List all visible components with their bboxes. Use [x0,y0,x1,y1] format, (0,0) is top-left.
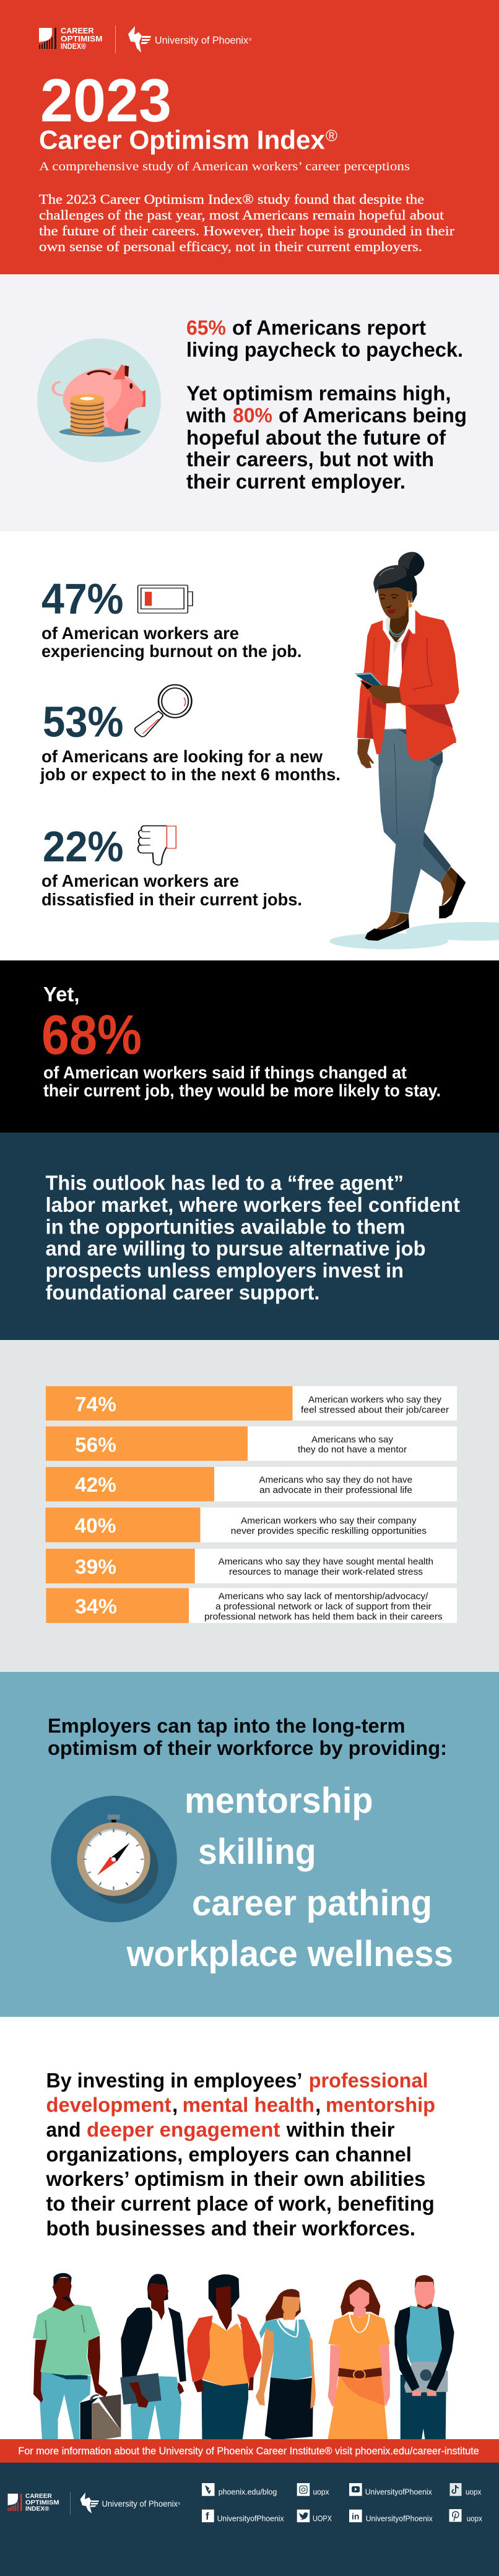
text: optimism stat [186,383,467,494]
person: woman in orange dress [328,2279,390,2439]
intro text block [39,191,455,254]
text: stay description: their current job, they would be more likely to stay. [43,1081,441,1100]
logo: University of Phoenix footer: ® [178,2502,181,2506]
icon: piggy bank [37,338,161,462]
text: investing in employees: mental health [183,2094,315,2117]
bar: 39% mental health resources: 39% [75,1555,116,1578]
intro text block: The 2023 Career Optimism Index® study found that despite the [39,191,424,207]
text: investing in employees [46,2069,435,2240]
person: man with briefcase [33,2273,121,2439]
panel: more information banner [0,2439,499,2463]
person: man with folder [120,2274,186,2439]
bar: 39% mental health resources: resources to manage their work-related stress [229,1567,423,1577]
social: youtube [349,2483,432,2497]
panel: free agent [0,1133,499,1340]
text: investing in employees: By investing in employees’ [46,2069,302,2092]
text: free agent labor market: foundational career support. [46,1282,319,1305]
text: optimism stat: 80% [233,404,272,427]
bar: 40% no reskilling: never provides specific reskilling opportunities [231,1526,427,1536]
title: ® [326,126,337,145]
social: facebook: f [206,2510,209,2522]
subtitle: A comprehensive study of American workers’ career perceptions [39,160,410,173]
panel: footer [0,2463,499,2576]
bar: 34% lack of mentorship [46,1588,457,1623]
bar: 39% mental health resources: Americans who say they have sought mental health [219,1556,433,1567]
panel: worker stats [0,531,499,960]
text: stay description: of American workers said if things changed at [43,1063,407,1082]
social: linkedin [349,2510,433,2523]
bar: 56% no mentor: Americans who say [311,1434,393,1445]
bar: 40% no reskilling [46,1508,457,1543]
text: free agent labor market: labor market, where workers feel confident [46,1194,460,1217]
illustration: group of six workers [33,2273,454,2439]
bar: 34% lack of mentorship: a professional network or lack of support from their [215,1601,432,1612]
logo: Career Optimism Index: OPTIMISM [61,34,103,43]
bar: 42% no advocate [46,1467,457,1501]
social: linkedin: in [352,2512,359,2522]
social: pinterest [449,2509,482,2523]
bar: 42% no advocate: 42% [75,1473,116,1496]
text: investing in employees: mentorship [326,2094,435,2117]
stat: 53% job seekers [40,698,341,784]
person: woman in blue top [256,2289,316,2439]
logo: Career Optimism Index footer: CAREER [25,2492,52,2500]
logo: Career Optimism Index footer [7,2492,59,2513]
social: twitter [297,2510,332,2523]
text: investing in employees: development [46,2094,171,2117]
social: instagram: uopx [313,2487,329,2497]
social: facebook [202,2510,284,2523]
social: blog: phoenix.edu/blog [219,2487,277,2497]
text: paycheck stat: 65% [186,317,226,340]
bar: 34% lack of mentorship: professional network has held them back in their careers [204,1611,443,1622]
text: free agent labor market: prospects unless employers invest in [46,1260,404,1282]
list: mentorship: mentorship [184,1781,373,1821]
intro text block: the future of their careers. However, their hope is grounded in their [39,223,455,238]
icon: thumbs down [138,826,176,865]
text: free agent labor market: and are willing to pursue alternative job [46,1237,426,1261]
stat: 68%: 68% [41,1004,142,1066]
text: investing in employees: workers’ optimism in their own abilities [46,2168,425,2191]
text: free agent labor market: This outlook has led to a “free agent” [46,1172,404,1195]
text: optimism stat: of Americans being [279,404,467,427]
social: twitter: UOPX [313,2513,332,2523]
panel: 68% would stay [0,960,499,1133]
illustration: woman walking with phone [329,552,499,949]
text: paycheck stat: of Americans report [232,317,426,340]
text: optimism stat: their careers, but not with [186,448,434,471]
text: optimism stat: hopeful about the future of [186,427,446,450]
panel: closing message [0,2017,499,2439]
title: 2023 [40,66,171,134]
stat: 53% job seekers: of Americans are looking for a new [41,747,323,766]
logo: Career Optimism Index: CAREER [61,26,94,35]
list: workplace wellness: workplace wellness [126,1934,453,1974]
list: career pathing: career pathing [192,1883,432,1923]
bar: 74% stressed: 74% [75,1393,116,1416]
panel: employers can provide [0,1672,499,2017]
bar: 56% no mentor: they do not have a mentor [298,1445,407,1455]
text: investing in employees: professional [309,2069,428,2092]
stat: 47% burnout [41,575,302,661]
social: pinterest: uopx [467,2513,482,2523]
intro text block: challenges of the past year, most Americans remain hopeful about [39,207,444,223]
text: investing in employees: to their current place of work, benefiting [46,2193,435,2216]
logo: University of Phoenix: University of Phoenix [155,35,248,46]
logo: Career Optimism Index: INDEX® [61,41,86,51]
text: free agent labor market: in the opportunities available to them [46,1216,405,1239]
logo: University of Phoenix: ® [249,38,252,42]
person: woman in red cardigan [187,2274,262,2439]
stat: 47% burnout: 47% [41,575,124,623]
social: facebook: UniversityofPhoenix [217,2513,284,2523]
text: optimism stat: Yet optimism remains high, [186,383,451,406]
bar: 40% no reskilling: American workers who say their company [241,1516,417,1526]
heading: employers: Employers can tap into the long-term [48,1715,405,1737]
panel: red header [0,0,499,274]
text: Yet: Yet, [43,983,79,1006]
text: investing in employees: deeper engagement [87,2119,280,2142]
stat: 22% dissatisfied: of American workers are [41,871,239,890]
text: investing in employees: both businesses and their workforces. [46,2217,415,2240]
text: investing in employees: , [172,2094,178,2117]
logo: Career Optimism Index [39,26,103,51]
stat: 22% dissatisfied: dissatisfied in their current jobs. [41,890,302,909]
stat: 47% burnout: of American workers are [41,624,239,643]
text: investing in employees: within their [286,2119,395,2142]
bar: 74% stressed: American workers who say they [308,1395,442,1405]
social: tiktok [449,2483,482,2497]
stat: 53% job seekers: job or expect to in the next 6 months. [40,765,341,784]
logo: University of Phoenix footer: University of Phoenix [102,2499,178,2509]
social: youtube: UniversityofPhoenix [365,2487,432,2497]
bar: 74% stressed: feel stressed about their job/career [301,1404,449,1415]
heading: employers [48,1715,447,1759]
stat: 22% dissatisfied: 22% [43,822,124,871]
text: investing in employees: , [315,2094,321,2117]
bar: 74% stressed [46,1386,457,1421]
stat: 47% burnout: experiencing burnout on the job. [41,642,302,661]
title [39,66,337,155]
panel: more information banner: For more information about the University of Phoenix Career Institute® visit phoenix.edu/career-institute [18,2445,479,2457]
icon: battery [138,585,193,613]
panel: paycheck [0,274,499,531]
title: Career Optimism Index [39,125,325,155]
logo: Career Optimism Index footer: OPTIMISM [25,2499,59,2507]
logo: University of Phoenix footer [80,2492,181,2513]
text: paycheck stat: living paycheck to paycheck. [186,339,463,362]
icon: compass stopwatch [51,1796,177,1922]
social: tiktok: uopx [466,2487,482,2497]
bar: 39% mental health resources [46,1549,457,1583]
bar: 56% no mentor [46,1427,457,1461]
text: investing in employees: and [46,2119,80,2142]
logo: Career Optimism Index footer: INDEX® [25,2505,50,2513]
text: stay description [43,1063,441,1100]
logo: University of Phoenix [128,26,252,53]
stat: 22% dissatisfied [41,822,302,909]
bar: 34% lack of mentorship: Americans who say lack of mentorship/advocacy/ [219,1591,428,1601]
heading: employers: optimism of their workforce by providing: [48,1737,447,1759]
social: instagram [297,2483,329,2497]
text: investing in employees: organizations, employers can channel [46,2144,412,2167]
bar: 40% no reskilling: 40% [74,1514,116,1537]
text: optimism stat: their current employer. [186,471,406,494]
social: blog [202,2483,277,2497]
bar: 56% no mentor: 56% [75,1433,116,1456]
stat: 53% job seekers: 53% [43,698,124,746]
intro text block: own sense of personal efficacy, not in their current employers. [39,239,422,254]
list: skilling: skilling [198,1832,316,1872]
bar: 42% no advocate: Americans who say they do not have [259,1474,412,1485]
text: paycheck stat [186,317,463,362]
text: free agent labor market [46,1172,460,1305]
social: linkedin: UniversityofPhoenix [366,2513,433,2523]
text: optimism stat: with [186,404,227,427]
icon: magnifier [135,685,191,737]
bar: 42% no advocate: an advocate in their professional life [259,1485,412,1495]
panel: bar chart section [0,1340,499,1672]
person: man with laptop [394,2275,454,2439]
bar: 34% lack of mentorship: 34% [75,1595,117,1618]
